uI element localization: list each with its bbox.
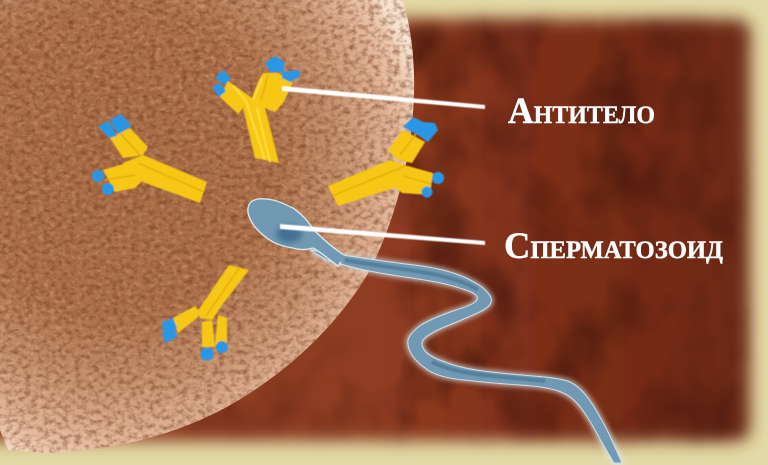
- sperm head shading: [276, 225, 302, 243]
- blue caps: [92, 114, 132, 195]
- sperm cell: [248, 199, 622, 463]
- blue caps: [162, 318, 228, 360]
- sperm neck join: [329, 251, 354, 266]
- egg cell: [0, 0, 420, 460]
- antibody: right: [328, 117, 444, 206]
- sperm tail glow: [310, 250, 622, 463]
- pointer line: sperm: [280, 224, 485, 245]
- pointer line: antibody: [282, 86, 485, 109]
- sperm tail: [310, 250, 622, 463]
- sperm head: [248, 199, 345, 266]
- sperm tail shading: [345, 260, 545, 381]
- antibody: top: [212, 56, 300, 163]
- blue caps: [403, 117, 444, 198]
- label: sperm: СПЕРМАТОЗОИД: [504, 226, 723, 267]
- antibody: bottom: [162, 265, 249, 360]
- antibody: left: [92, 114, 207, 203]
- blue caps: [212, 56, 300, 97]
- label: antibody: АНТИТЕЛО: [508, 91, 655, 132]
